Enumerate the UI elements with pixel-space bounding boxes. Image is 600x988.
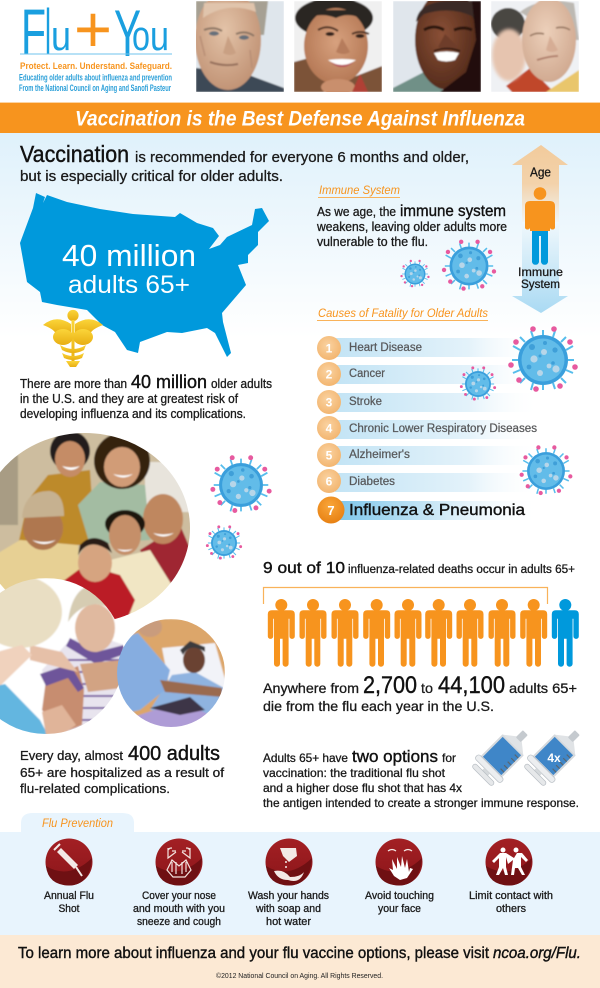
row 5: Alzheimer's: Alzheimer's <box>349 449 410 461</box>
text: 9 out of 10 deaths <box>263 560 575 577</box>
text: 2,700 to 44,100: die from the flu each year in the U.S. <box>263 698 494 714</box>
arrow: age up, immune system down, with person: Immune <box>518 265 563 279</box>
text: 40 million older adults: 40 million <box>131 372 207 392</box>
label: cover your nose <box>133 890 225 928</box>
label: annual flu shot: Annual Flu <box>44 890 94 902</box>
text: immune system weakens: weakens, leaving older adults more <box>316 220 507 234</box>
text: two options for vaccination: vaccination: the traditional flu shot <box>263 766 446 780</box>
icon: gold caduceus <box>43 310 103 367</box>
logo: Flu + You: u <box>51 12 71 59</box>
row 7: influenza and pneumonia: 7 <box>327 503 335 518</box>
label: annual flu shot <box>44 890 94 915</box>
text: two options for vaccination: two options <box>352 747 438 766</box>
label: avoid touching: Avoid touching <box>365 890 434 902</box>
row 1: heart disease: Heart Disease <box>349 342 422 354</box>
text: 2,700 to 44,100: to <box>421 680 433 696</box>
title banner <box>0 102 600 133</box>
icon: standard flu vaccine syringe <box>469 720 538 789</box>
row 2: cancer <box>317 362 540 386</box>
text: two options for vaccination <box>263 747 579 810</box>
label: wash your hands <box>248 890 329 928</box>
logo: Flu + You: Educating older adults about influenza and prevention <box>19 72 172 84</box>
footer <box>0 935 600 988</box>
row 3: stroke <box>317 390 540 414</box>
text: 2,700 to 44,100: adults 65+ <box>509 680 577 696</box>
title banner: Vaccination is the Best Defense Against Influenza <box>75 108 525 130</box>
text: 400 adults hospitalized: 400 adults <box>128 743 220 765</box>
icon: syringe <box>46 838 92 886</box>
row 2: cancer: 2 <box>326 368 333 382</box>
row 4: chronic lower respiratory diseases <box>317 416 540 440</box>
photo: laughing man <box>393 0 481 92</box>
label: cover your nose: Cover your nose <box>142 890 216 902</box>
text: immune system weakens: vulnerable to the flu. <box>317 235 428 249</box>
icon: wash hands <box>266 838 312 886</box>
logo: Flu + You <box>19 0 172 94</box>
virus: medium beside list <box>520 445 572 495</box>
text: 2,700 to 44,100: 44,100 <box>438 672 505 699</box>
label: limit contact: Limit contact with <box>469 890 553 902</box>
map: United States with 40 million adults 65+: 40 million <box>62 238 196 273</box>
photo: patient in hospital bed circle <box>117 619 225 727</box>
intro statement: Vaccination <box>20 141 129 167</box>
row 3: stroke: Stroke <box>349 396 382 408</box>
heading: Flu Prevention: Flu Prevention <box>42 818 113 830</box>
photo: smiling woman <box>294 0 382 95</box>
label: annual flu shot: Shot <box>58 903 80 915</box>
photo: older man <box>195 0 284 92</box>
row 6: diabetes: 6 <box>326 474 333 488</box>
row 1: heart disease <box>317 336 540 360</box>
arrow: age up, immune system down, with person: Age <box>530 164 551 180</box>
intro statement: but is especially critical for older adults. <box>20 168 283 185</box>
logo: Flu + You: From the National Council on Aging and Sanofi Pasteur <box>19 83 171 94</box>
icon: cover nose and mouth <box>156 838 202 886</box>
photo: older couple <box>491 0 579 92</box>
text: two options for vaccination: Adults 65+ have <box>263 751 348 765</box>
intro statement <box>20 141 469 185</box>
text: immune system weakens: immune system <box>400 203 506 220</box>
row 6: diabetes <box>317 469 540 493</box>
row 4: chronic lower respiratory diseases: 4 <box>326 422 333 436</box>
row 5: Alzheimer's <box>317 443 540 467</box>
map: United States with 40 million adults 65+: adults 65+ <box>68 271 190 299</box>
row 2: cancer: Cancer <box>349 368 385 380</box>
text: 9 out of 10 deaths: influenza-related deaths occur in adults 65+ <box>348 564 575 576</box>
label: wash your hands: with soap and <box>255 903 321 915</box>
text: 40 million older adults <box>20 372 272 421</box>
text: 40 million older adults: There are more than <box>20 377 127 391</box>
arrow: age up, immune system down, with person <box>512 145 568 313</box>
label: limit contact: others <box>496 903 526 915</box>
row 5: Alzheimer's: 5 <box>326 448 333 462</box>
virus: large beside list <box>508 326 578 392</box>
panel: flu prevention <box>0 813 600 935</box>
label: avoid touching: your face <box>378 903 421 915</box>
map: United States with 40 million adults 65+ <box>20 193 269 357</box>
intro statement: is recommended for everyone 6 months and older, <box>135 149 469 166</box>
label: cover your nose: and mouth with you <box>133 903 225 915</box>
footer: ncoa.org/Flu. <box>493 945 581 962</box>
virus: large near immune text <box>442 240 496 291</box>
label: avoid touching <box>365 890 434 915</box>
text: 40 million older adults: in the U.S. and they are at greatest risk of <box>20 392 238 406</box>
row 1: heart disease: 1 <box>326 342 333 356</box>
logo: Flu + You: u <box>150 12 169 59</box>
text: 400 adults hospitalized <box>20 743 224 796</box>
virus: small left of list <box>206 525 242 560</box>
icon: high-dose flu vaccine syringe <box>521 720 590 789</box>
text: two options for vaccination: for <box>442 751 456 765</box>
text: 9 out of 10 deaths: 9 out of 10 <box>263 560 345 577</box>
text: 40 million older adults: older adults <box>211 377 272 391</box>
virus: small near immune text <box>400 260 430 287</box>
virus: small over cancer row <box>460 366 496 401</box>
text: 2,700 to 44,100 <box>263 672 577 714</box>
label: wash your hands: hot water <box>266 916 311 928</box>
icon: limit contact <box>486 838 532 886</box>
text: immune system weakens: As we age, the <box>317 205 396 219</box>
text: 400 adults hospitalized: 65+ are hospitalized as a result of <box>20 765 224 780</box>
row 3: stroke: 3 <box>326 396 333 410</box>
label: wash your hands: Wash your hands <box>248 890 329 902</box>
heading: Immune System: Immune System <box>319 185 400 197</box>
icon: avoid touching face <box>376 838 422 886</box>
text: 40 million older adults: developing influenza and its complications. <box>20 407 246 421</box>
arrow: age up, immune system down, with person: System <box>521 277 560 291</box>
text: two options for vaccination: the antigen intended to create a stronger immune response. <box>263 796 579 810</box>
logo: Flu + You: Protect. Learn. Understand. Safeguard. <box>20 61 172 72</box>
row 7: influenza and pneumonia: Influenza & Pneumonia <box>349 502 525 519</box>
label: cover your nose: sneeze and cough <box>137 916 221 928</box>
text: immune system weakens <box>316 203 507 249</box>
photo: family circle <box>0 430 195 625</box>
logo: Flu + You: o <box>132 12 150 59</box>
footer: ©2012 National Council on Aging. All Rights Reserved. <box>216 972 383 980</box>
bracket over nine figures <box>264 588 548 604</box>
row 7: influenza and pneumonia <box>318 496 540 524</box>
row 4: chronic lower respiratory diseases: Chronic Lower Respiratory Diseases <box>349 423 537 435</box>
row 6: diabetes: Diabetes <box>349 476 395 488</box>
text: 400 adults hospitalized: flu-related complications. <box>20 781 170 796</box>
text: 2,700 to 44,100: 2,700 <box>363 672 417 699</box>
virus: large left of list <box>210 455 272 513</box>
list: causes of fatality <box>317 336 540 524</box>
text: 2,700 to 44,100: Anywhere from <box>263 680 359 696</box>
pictogram: nine orange people and one blue <box>268 599 579 667</box>
text: two options for vaccination: and a higher dose flu shot that has 4x <box>263 781 462 795</box>
footer: To learn more about influenza and your flu vaccine options, please visit <box>18 945 490 962</box>
heading: Causes of Fatality: Causes of Fatality for Older Adults <box>318 308 488 320</box>
label: limit contact <box>469 890 553 915</box>
photo: nurse vaccinating woman circle <box>0 576 124 735</box>
text: 400 adults hospitalized: Every day, almost <box>20 748 123 763</box>
icon: high-dose flu vaccine syringe: 4x <box>547 751 561 765</box>
